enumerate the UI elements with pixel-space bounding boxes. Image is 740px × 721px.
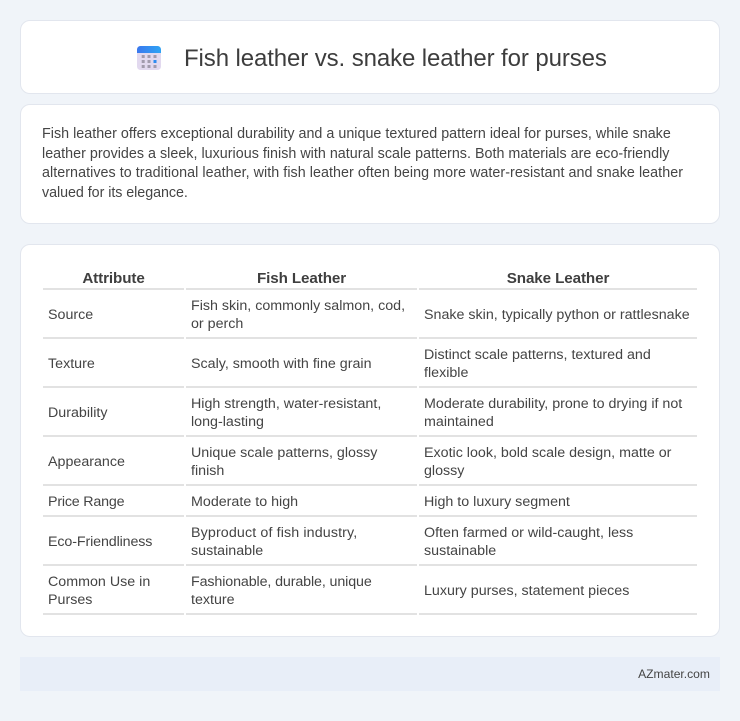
footer bar — [20, 657, 720, 691]
comparison table: Snake skin, typically python or rattlesnake — [424, 307, 690, 323]
comparison table: sustainable — [191, 543, 263, 559]
intro text: leather provides a sleek, luxurious finish with natural scale patterns. Both materials are eco-friendly — [42, 146, 669, 162]
title card — [20, 20, 720, 94]
comparison table: High strength, water-resistant, — [191, 396, 381, 412]
comparison table: Source — [48, 307, 93, 323]
comparison table: Distinct scale patterns, textured and — [424, 347, 651, 363]
header row — [82, 270, 610, 287]
intro text — [42, 126, 683, 201]
comparison table: Unique scale patterns, glossy — [191, 445, 377, 461]
comparison table: Purses — [48, 592, 92, 608]
header row: Attribute — [82, 270, 145, 287]
comparison table: Luxury purses, statement pieces — [424, 583, 629, 599]
comparison table: High to luxury segment — [424, 494, 570, 510]
intro text: alternatives to traditional leather, with fish leather often being more water-resistant and snake leather — [42, 165, 683, 181]
comparison table: Byproduct of fish industry, — [191, 525, 357, 541]
comparison table: Moderate to high — [191, 494, 298, 510]
comparison table: Often farmed or wild-caught, less — [424, 525, 633, 541]
header row: Fish Leather — [257, 270, 346, 287]
comparison table: glossy — [424, 463, 464, 479]
comparison table: Texture — [48, 356, 95, 372]
header row: Snake Leather — [507, 270, 609, 287]
comparison table: Eco-Friendliness — [48, 534, 152, 550]
intro text: Fish leather offers exceptional durability and a unique textured pattern ideal for purses, while snake — [42, 126, 671, 142]
comparison table: Moderate durability, prone to drying if not — [424, 396, 682, 412]
comparison table: or perch — [191, 316, 243, 332]
comparison table: maintained — [424, 414, 494, 430]
comparison table: texture — [191, 592, 235, 608]
comparison table: flexible — [424, 365, 468, 381]
comparison table: Durability — [48, 405, 107, 421]
panel: introduction — [20, 104, 720, 224]
panel: comparison table — [20, 244, 720, 637]
intro text: valued for its elegance. — [42, 185, 188, 201]
comparison table — [43, 270, 697, 615]
icon: calendar — [137, 46, 161, 70]
comparison table: Price Range — [48, 494, 124, 510]
comparison table: Scaly, smooth with fine grain — [191, 356, 372, 372]
comparison table: finish — [191, 463, 224, 479]
title: Fish leather vs. snake leather for purses — [184, 45, 607, 72]
comparison table: Fashionable, durable, unique — [191, 574, 372, 590]
comparison table: Exotic look, bold scale design, matte or — [424, 445, 671, 461]
comparison table: sustainable — [424, 543, 496, 559]
footer credit: AZmater.com — [638, 667, 710, 681]
comparison table: Fish skin, commonly salmon, cod, — [191, 298, 405, 314]
comparison table: Appearance — [48, 454, 125, 470]
comparison table: Common Use in — [48, 574, 150, 590]
comparison table: long-lasting — [191, 414, 264, 430]
